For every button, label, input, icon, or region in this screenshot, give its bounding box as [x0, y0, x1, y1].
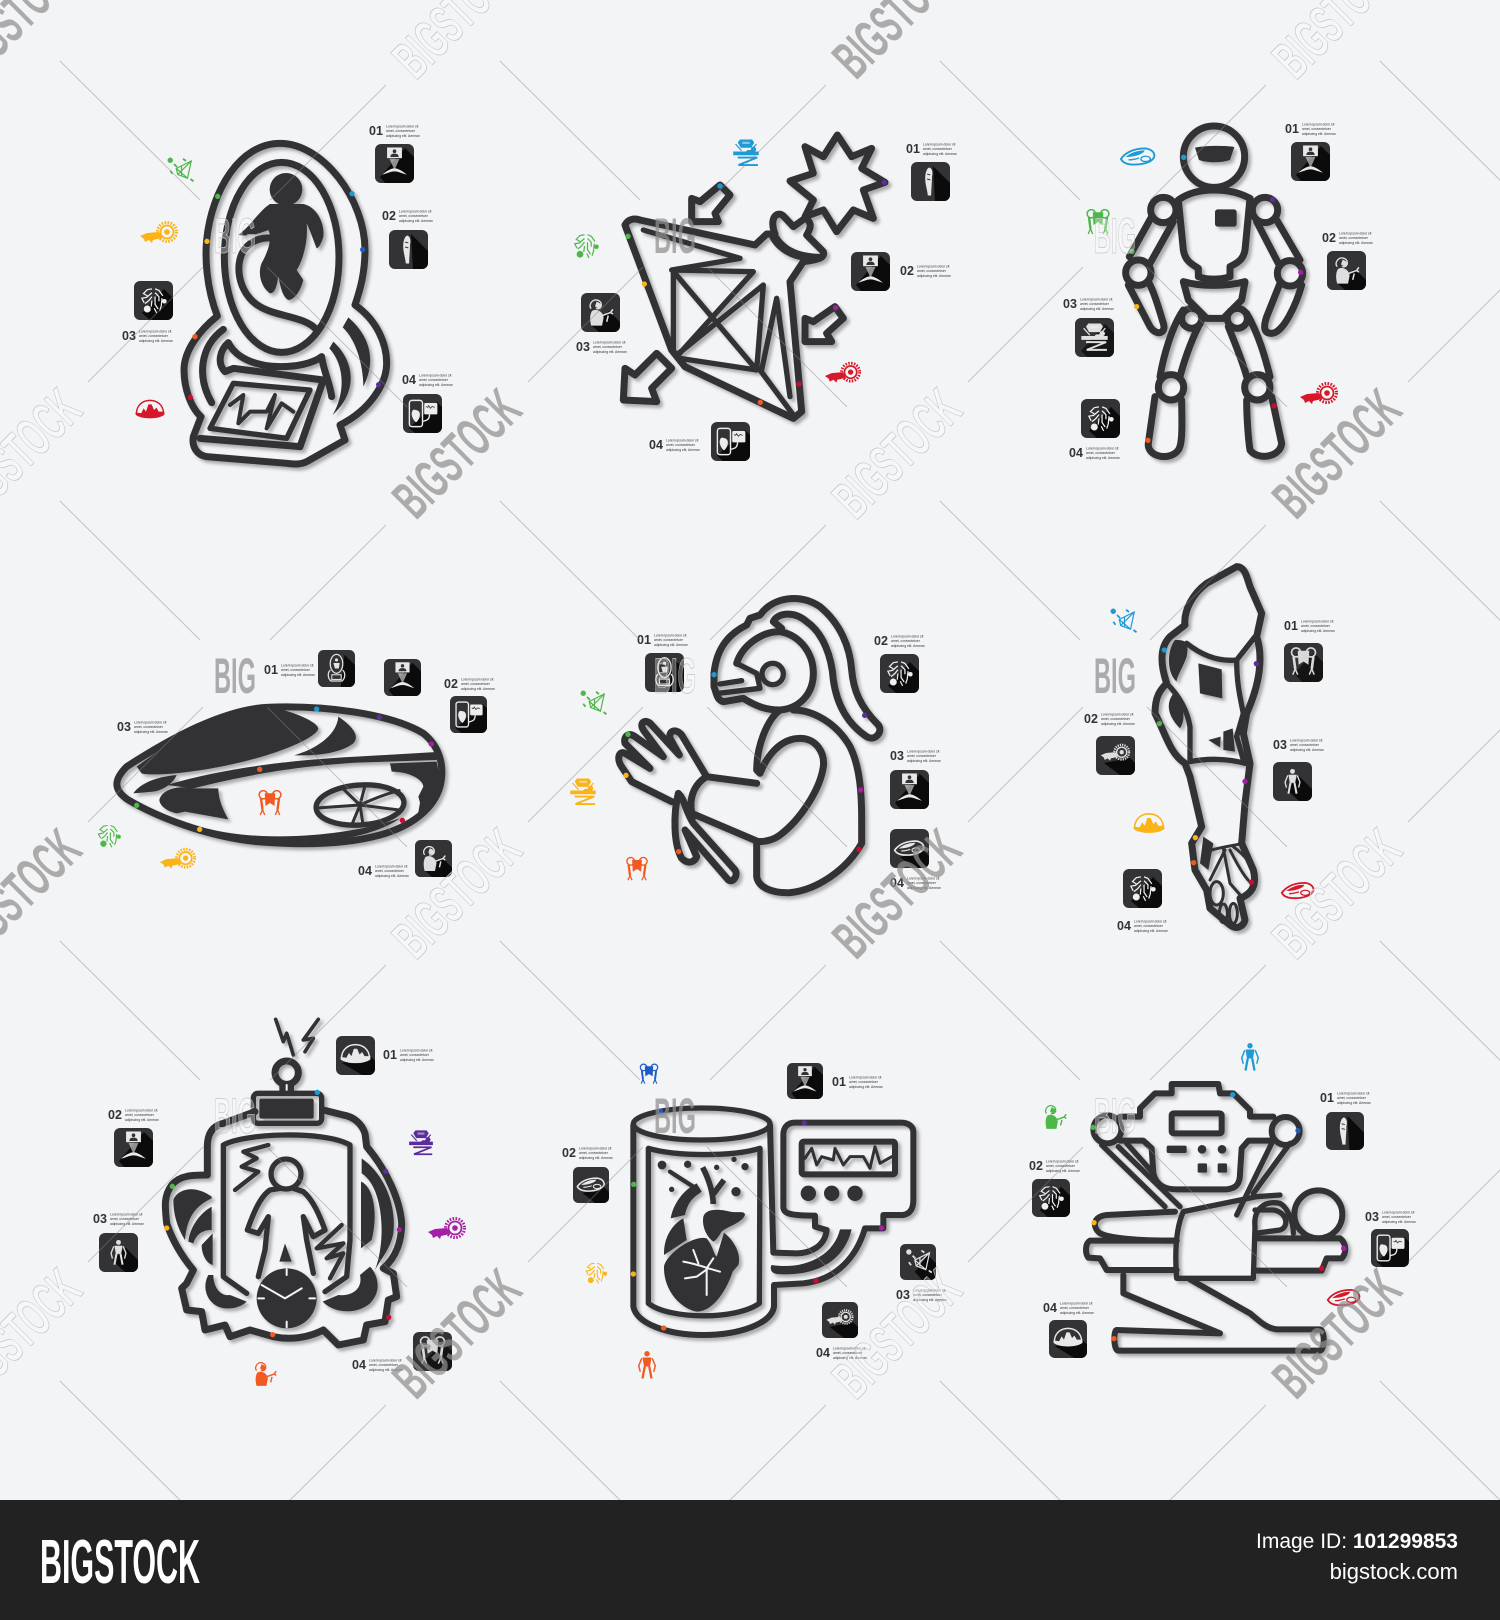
icon: blue table: [733, 140, 759, 165]
icon: green jetpack: [1087, 210, 1109, 234]
icon: blue crystal: [1111, 609, 1136, 632]
label 02: Lorem ipsum dolor sit: [399, 210, 431, 214]
label 01: adipiscing elit. Aenean: [1337, 1101, 1371, 1105]
label 04: amet, consectetuer: [375, 869, 405, 873]
watermark: diagonal lines and stock logos: BIGSTOCK: [821, 817, 973, 969]
label 04: 04: [649, 438, 663, 452]
watermark: diagonal lines and stock logos: BIG: [1094, 1088, 1136, 1144]
label 04: adipiscing elit. Aenean: [375, 874, 409, 878]
label 03: amet, consectetuer: [907, 754, 937, 758]
icon: blue robot: [1242, 1043, 1258, 1070]
label 04: amet, consectetuer: [833, 1351, 863, 1355]
watermark: diagonal lines and stock logos: BIG: [214, 208, 256, 264]
label 04: [1069, 446, 1120, 460]
label 01: amet, consectetuer: [923, 147, 953, 151]
label 02: amet, consectetuer: [1046, 1164, 1076, 1168]
label 04: Lorem ipsum dolor sit: [1086, 446, 1118, 450]
label 01: amet, consectetuer: [281, 668, 311, 672]
label 02: adipiscing elit. Aenean: [461, 687, 495, 691]
label 02: 02: [382, 209, 396, 223]
label 02: Lorem ipsum dolor sit: [1101, 712, 1133, 716]
label 01: amet, consectetuer: [1301, 624, 1331, 628]
label 04: amet, consectetuer: [666, 443, 696, 447]
label 03: adipiscing elit. Aenean: [1080, 307, 1114, 311]
label 01: Lorem ipsum dolor sit: [1301, 620, 1333, 624]
icon tile unnumbered: [384, 659, 421, 696]
label 04: Lorem ipsum dolor sit: [369, 1358, 401, 1362]
icon: green crystal: [168, 158, 194, 181]
label 03: [117, 720, 168, 734]
label 01: adipiscing elit. Aenean: [849, 1085, 883, 1089]
label 01: adipiscing elit. Aenean: [1302, 132, 1336, 136]
label 01: 01: [832, 1075, 846, 1089]
label 03: amet, consectetuer: [913, 1293, 943, 1297]
panel: car infographic: [98, 650, 495, 878]
icon: green brain: [575, 235, 599, 258]
icon tile 01: [1326, 1112, 1364, 1150]
icon: red sun rocket: [1300, 384, 1336, 404]
label 01: adipiscing elit. Aenean: [386, 134, 420, 138]
label 04: [402, 373, 453, 387]
label 01: [383, 1048, 434, 1062]
icon: yellow table: [570, 778, 596, 804]
icon tile 04: [415, 840, 452, 877]
label 01: Lorem ipsum dolor sit: [654, 634, 686, 638]
label 04: 04: [402, 373, 416, 387]
panel: robot infographic: [1063, 122, 1373, 460]
label 02: amet, consectetuer: [891, 639, 921, 643]
icon: yellow dome: [1134, 814, 1164, 833]
icon tile 03: [581, 293, 620, 332]
label 04: adipiscing elit. Aenean: [419, 383, 453, 387]
label 04: 04: [1069, 446, 1083, 460]
label 02: amet, consectetuer: [579, 1151, 609, 1155]
label 03: 03: [117, 720, 131, 734]
site address: bigstock.com: [1330, 1559, 1458, 1584]
label 03: adipiscing elit. Aenean: [1290, 748, 1324, 752]
label 04: [1117, 919, 1168, 933]
panel: crystal infographic: [575, 135, 957, 461]
label 03: [122, 329, 173, 343]
icon tile 02: [573, 1167, 609, 1203]
label 01: adipiscing elit. Aenean: [1301, 629, 1335, 633]
panel: time machine infographic: [93, 1019, 464, 1386]
label 01: 01: [1284, 619, 1298, 633]
label 03: amet, consectetuer: [110, 1217, 140, 1221]
label 04: Lorem ipsum dolor sit: [419, 374, 451, 378]
label 01: 01: [1285, 122, 1299, 136]
label 03: Lorem ipsum dolor sit: [134, 720, 166, 724]
label 03: [1063, 297, 1114, 311]
label 02: 02: [108, 1108, 122, 1122]
label 03: [1273, 738, 1324, 752]
icon tile 02: [1032, 1179, 1070, 1217]
watermark: diagonal lines and stock logos: BIG: [1094, 208, 1136, 264]
label 04: adipiscing elit. Aenean: [666, 448, 700, 452]
label 01: adipiscing elit. Aenean: [281, 673, 315, 677]
icon tile 02: [1327, 251, 1366, 290]
label 02: Lorem ipsum dolor sit: [1046, 1160, 1078, 1164]
label 03: 03: [1365, 1210, 1379, 1224]
label 02: amet, consectetuer: [399, 214, 429, 218]
label 04: 04: [1117, 919, 1131, 933]
label 03: adipiscing elit. Aenean: [913, 1298, 947, 1302]
icon tile 02: [851, 252, 890, 291]
label 02: Lorem ipsum dolor sit: [461, 678, 493, 682]
label 02: 02: [1322, 231, 1336, 245]
icon tile 04: [711, 422, 750, 461]
icon tile 01: [1284, 643, 1323, 682]
icon tile 04: [822, 1302, 858, 1338]
label 01: Lorem ipsum dolor sit: [1302, 122, 1334, 126]
label 04: Lorem ipsum dolor sit: [1134, 920, 1166, 924]
icon tile 04: [403, 394, 442, 433]
label 04: Lorem ipsum dolor sit: [1060, 1302, 1092, 1306]
label 03: 03: [93, 1212, 107, 1226]
figure: robotic arm: [1155, 567, 1262, 927]
label 02: Lorem ipsum dolor sit: [891, 634, 923, 638]
label 03: [890, 749, 941, 763]
label 01: amet, consectetuer: [386, 129, 416, 133]
label 04: adipiscing elit. Aenean: [1086, 456, 1120, 460]
watermark: diagonal lines and stock logos: BIGSTOCK: [381, 817, 533, 969]
label 01: amet, consectetuer: [1302, 127, 1332, 131]
icon: blue car: [1121, 148, 1154, 165]
label 01: [1320, 1091, 1371, 1105]
label 02: adipiscing elit. Aenean: [1101, 722, 1135, 726]
icon tile 01: [336, 1036, 375, 1075]
label 04: [358, 864, 409, 878]
footer bar: BIGSTOCK: [40, 1528, 200, 1597]
label 04: amet, consectetuer: [369, 1363, 399, 1367]
label 03: adipiscing elit. Aenean: [907, 759, 941, 763]
label 01: 01: [637, 633, 651, 647]
watermark: diagonal lines and stock logos: BIG: [654, 648, 696, 704]
icon tile 01: [911, 162, 950, 201]
label 01: amet, consectetuer: [400, 1053, 430, 1057]
icon: red dome: [136, 400, 164, 418]
label 02: 02: [444, 677, 458, 691]
label 03: amet, consectetuer: [1080, 302, 1110, 306]
label 02: amet, consectetuer: [917, 269, 947, 273]
icon: orange jetpack: [627, 857, 647, 880]
label 01: [637, 633, 688, 647]
label 02: 02: [874, 634, 888, 648]
icon tile 02: [450, 696, 487, 733]
label 03: Lorem ipsum dolor sit: [593, 340, 625, 344]
watermark: diagonal lines and stock logos: BIGSTOCK: [821, 377, 973, 529]
icon: red car: [1328, 1290, 1359, 1305]
label 04: [352, 1358, 403, 1372]
label 01: [906, 142, 957, 156]
label 01: 01: [264, 663, 278, 677]
watermark: diagonal lines and stock logos: BIG: [654, 208, 696, 264]
label 02: amet, consectetuer: [1101, 717, 1131, 721]
icon: orange praying figure: [256, 1363, 276, 1386]
icon tile 04: [413, 1332, 452, 1371]
icon: green praying figure: [1046, 1106, 1066, 1129]
label 03: Lorem ipsum dolor sit: [1382, 1210, 1414, 1214]
label 03: amet, consectetuer: [1382, 1215, 1412, 1219]
icon tile 03: [890, 770, 929, 809]
label 02: Lorem ipsum dolor sit: [917, 264, 949, 268]
label 01: amet, consectetuer: [849, 1080, 879, 1084]
icon: red car: [1282, 883, 1313, 898]
label 04: [816, 1346, 867, 1360]
label 01: adipiscing elit. Aenean: [400, 1058, 434, 1062]
label 03: Lorem ipsum dolor sit: [913, 1288, 945, 1292]
label 04: 04: [816, 1346, 830, 1360]
image id: Image ID: 101299853: [1256, 1530, 1458, 1553]
label 02: Lorem ipsum dolor sit: [579, 1146, 611, 1150]
label 01: 01: [1320, 1091, 1334, 1105]
icon: orange jetpack: [259, 791, 281, 815]
label 04: amet, consectetuer: [907, 881, 937, 885]
label 03: Lorem ipsum dolor sit: [907, 750, 939, 754]
label 03: Lorem ipsum dolor sit: [1080, 298, 1112, 302]
label 01: Lorem ipsum dolor sit: [400, 1048, 432, 1052]
label 01: [1284, 619, 1335, 633]
label 04: Lorem ipsum dolor sit: [907, 876, 939, 880]
figure: person in capsule: [184, 143, 387, 464]
icon: yellow sun rocket: [160, 849, 195, 869]
label 02: adipiscing elit. Aenean: [1046, 1169, 1080, 1173]
panel: surgery robot infographic: [1029, 1043, 1416, 1358]
footer bar: [0, 1500, 1500, 1620]
label 01: Lorem ipsum dolor sit: [281, 664, 313, 668]
label 04: adipiscing elit. Aenean: [833, 1356, 867, 1360]
icon tile 02: [389, 230, 428, 269]
label 01: adipiscing elit. Aenean: [923, 152, 957, 156]
label 03: amet, consectetuer: [134, 725, 164, 729]
figure: person in chamber with clock and gear: [164, 1019, 402, 1345]
label 02: Lorem ipsum dolor sit: [125, 1108, 157, 1112]
label 04: 04: [358, 864, 372, 878]
label 02: [1029, 1159, 1080, 1173]
label 03: adipiscing elit. Aenean: [1382, 1220, 1416, 1224]
label 03: amet, consectetuer: [593, 345, 623, 349]
label 03: 03: [576, 340, 590, 354]
label 02: amet, consectetuer: [461, 682, 491, 686]
icon tile 04: [1123, 869, 1162, 908]
icon tile 03: [1075, 318, 1114, 357]
icon tile 01: [1291, 142, 1330, 181]
label 04: [1043, 1301, 1094, 1315]
label 01: 01: [369, 124, 383, 138]
icon: yellow sun rocket: [140, 222, 176, 243]
label 02: amet, consectetuer: [125, 1113, 155, 1117]
watermark: diagonal lines and stock logos: BIGSTOCK: [821, 1257, 973, 1409]
label 02: adipiscing elit. Aenean: [917, 274, 951, 278]
label 04: 04: [352, 1358, 366, 1372]
icon tile 01: [645, 653, 684, 692]
panel: heart jar infographic: [562, 1063, 947, 1378]
figure: patient on table under robotic machine: [1086, 1084, 1346, 1351]
label 02: amet, consectetuer: [1339, 236, 1369, 240]
icon: red sun rocket: [825, 363, 860, 383]
label 02: adipiscing elit. Aenean: [125, 1118, 159, 1122]
icon: green brain: [98, 826, 121, 847]
icon tile 02: [1096, 736, 1135, 775]
label 04: amet, consectetuer: [1060, 1306, 1090, 1310]
label 02: adipiscing elit. Aenean: [891, 644, 925, 648]
icon tile 03: [99, 1233, 138, 1272]
icon: orange robot: [639, 1351, 655, 1378]
label 04: [649, 438, 700, 452]
icon tile 01: [318, 650, 355, 687]
icon tile 01: [787, 1063, 823, 1099]
icon tile 01: [375, 144, 414, 183]
label 01: [369, 124, 420, 138]
label 04: adipiscing elit. Aenean: [1134, 929, 1168, 933]
label 04: amet, consectetuer: [419, 378, 449, 382]
label 03: Lorem ipsum dolor sit: [139, 330, 171, 334]
figure: heart in jar with monitor: [631, 1108, 913, 1335]
label 03: [93, 1212, 144, 1226]
label 01: adipiscing elit. Aenean: [654, 643, 688, 647]
label 02: Lorem ipsum dolor sit: [1339, 232, 1371, 236]
label 03: adipiscing elit. Aenean: [593, 350, 627, 354]
watermark: diagonal lines and stock logos: BIG: [1094, 648, 1136, 704]
label 01: Lorem ipsum dolor sit: [386, 124, 418, 128]
label 04: 04: [1043, 1301, 1057, 1315]
label 01: 01: [383, 1048, 397, 1062]
label 02: [562, 1146, 613, 1160]
label 03: [1365, 1210, 1416, 1224]
label 02: adipiscing elit. Aenean: [579, 1156, 613, 1160]
label 02: 02: [1084, 712, 1098, 726]
panel: robotic arm infographic: [1084, 567, 1335, 933]
label 03: 03: [122, 329, 136, 343]
label 01: [832, 1075, 883, 1089]
label 01: 01: [906, 142, 920, 156]
label 03: amet, consectetuer: [1290, 743, 1320, 747]
label 04: amet, consectetuer: [1086, 451, 1116, 455]
label 03: adipiscing elit. Aenean: [110, 1222, 144, 1226]
label 02: [382, 209, 433, 223]
label 04: 04: [890, 876, 904, 890]
icon: purple table: [409, 1130, 433, 1154]
label 03: 03: [1063, 297, 1077, 311]
icon tile 04: [890, 829, 929, 868]
label 01: Lorem ipsum dolor sit: [923, 142, 955, 146]
label 01: Lorem ipsum dolor sit: [849, 1076, 881, 1080]
label 03: 03: [890, 749, 904, 763]
label 01: amet, consectetuer: [1337, 1096, 1367, 1100]
figure: car: [117, 706, 442, 844]
label 02: adipiscing elit. Aenean: [399, 219, 433, 223]
label 02: [444, 677, 495, 691]
label 03: [896, 1288, 947, 1302]
label 04: amet, consectetuer: [1134, 924, 1164, 928]
label 03: adipiscing elit. Aenean: [139, 339, 173, 343]
label 01: [264, 663, 315, 677]
icon: blue jetpack: [640, 1064, 658, 1084]
figure: praying figure: [619, 599, 880, 893]
label 03: [576, 340, 627, 354]
watermark: diagonal lines and stock logos: BIG: [654, 1088, 696, 1144]
label 03: 03: [896, 1288, 910, 1302]
icon tile 03: [900, 1244, 936, 1280]
label 02: 02: [1029, 1159, 1043, 1173]
label 02: [874, 634, 925, 648]
label 02: [1322, 231, 1373, 245]
label 01: [1285, 122, 1336, 136]
label 02: [108, 1108, 159, 1122]
label 03: 03: [1273, 738, 1287, 752]
figure: crystal with sun and arrows: [623, 135, 887, 418]
label 01: Lorem ipsum dolor sit: [1337, 1092, 1369, 1096]
watermark: diagonal lines and stock logos: BIGSTOCK: [381, 377, 533, 529]
label 03: Lorem ipsum dolor sit: [1290, 738, 1322, 742]
label 02: 02: [562, 1146, 576, 1160]
icon tile 02: [114, 1128, 153, 1167]
label 03: adipiscing elit. Aenean: [134, 730, 168, 734]
icon: yellow brain: [586, 1263, 607, 1283]
watermark: diagonal lines and stock logos: BIG: [214, 1088, 256, 1144]
watermark: diagonal lines and stock logos: BIGSTOCK: [381, 1257, 533, 1409]
icon: green crystal: [581, 691, 606, 714]
label 04: Lorem ipsum dolor sit: [375, 864, 407, 868]
label 04: adipiscing elit. Aenean: [1060, 1311, 1094, 1315]
figure: robot: [1126, 126, 1303, 457]
icon tile 04: [1081, 399, 1120, 438]
label 02: 02: [900, 264, 914, 278]
panel: praying astronaut infographic: [570, 599, 941, 893]
panel: capsule infographic: [122, 124, 453, 464]
icon tile 03: [1273, 762, 1312, 801]
label 02: [1084, 712, 1135, 726]
label 04: Lorem ipsum dolor sit: [833, 1346, 865, 1350]
icon tile 02: [880, 654, 919, 693]
icon tile 03: [1371, 1229, 1409, 1267]
label 01: amet, consectetuer: [654, 638, 684, 642]
icon tile 04: [1049, 1320, 1087, 1358]
label 04: [890, 876, 941, 890]
icon: magenta sun rocket: [428, 1218, 464, 1239]
watermark: diagonal lines and stock logos: BIG: [214, 648, 256, 704]
icon tile 03: [134, 281, 173, 320]
label 04: adipiscing elit. Aenean: [369, 1368, 403, 1372]
label 02: [900, 264, 951, 278]
label 03: amet, consectetuer: [139, 334, 169, 338]
label 03: Lorem ipsum dolor sit: [110, 1212, 142, 1216]
label 02: adipiscing elit. Aenean: [1339, 241, 1373, 245]
label 04: Lorem ipsum dolor sit: [666, 438, 698, 442]
label 04: adipiscing elit. Aenean: [907, 886, 941, 890]
